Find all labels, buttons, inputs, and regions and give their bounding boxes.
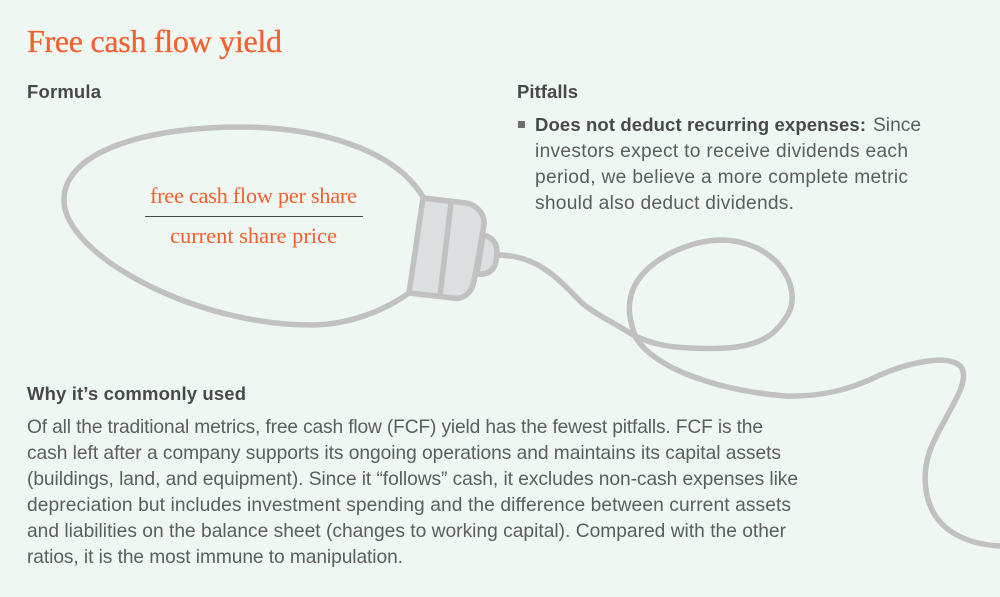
fraction line xyxy=(145,216,363,217)
cord xyxy=(497,240,1000,546)
body text: and liabilities on the balance sheet (changes to working capital). Compared with the other xyxy=(27,521,787,542)
bulb glass outline xyxy=(64,127,423,325)
pitfalls list item: should also deduct dividends. xyxy=(535,193,794,214)
icon: light bulb with cord xyxy=(64,127,1000,546)
bulb socket xyxy=(409,198,484,298)
formula xyxy=(145,183,363,248)
numerator: free cash flow per share xyxy=(150,183,357,208)
body text xyxy=(27,417,798,568)
heading: formula: Formula xyxy=(27,81,102,102)
heading: pitfalls: Pitfalls xyxy=(517,81,578,102)
pitfalls list item: Since xyxy=(873,115,921,136)
body text: ratios, it is the most immune to manipulation. xyxy=(27,547,403,568)
pitfalls list item: investors expect to receive dividends each xyxy=(535,141,908,162)
heading: why it's commonly used: Why it’s commonly used xyxy=(27,383,246,404)
pitfall text: Does not deduct recurring expenses: xyxy=(535,114,866,135)
socket divider xyxy=(440,203,451,296)
pitfalls list item: period, we believe a more complete metric xyxy=(535,167,908,188)
body text: depreciation but includes investment spending and the difference between current assets xyxy=(27,495,791,516)
bullet xyxy=(518,121,525,128)
bulb socket cap xyxy=(477,235,497,274)
body text: Of all the traditional metrics, free cash flow (FCF) yield has the fewest pitfalls. FCF is the xyxy=(27,417,763,438)
body text: cash left after a company supports its ongoing operations and maintains its capital assets xyxy=(27,443,781,464)
title: Free cash flow yield xyxy=(27,23,282,59)
denominator: current share price xyxy=(170,223,337,248)
pitfalls list item xyxy=(518,114,921,214)
body text: (buildings, land, and equipment). Since it “follows” cash, it excludes non-cash expenses like xyxy=(27,469,798,490)
